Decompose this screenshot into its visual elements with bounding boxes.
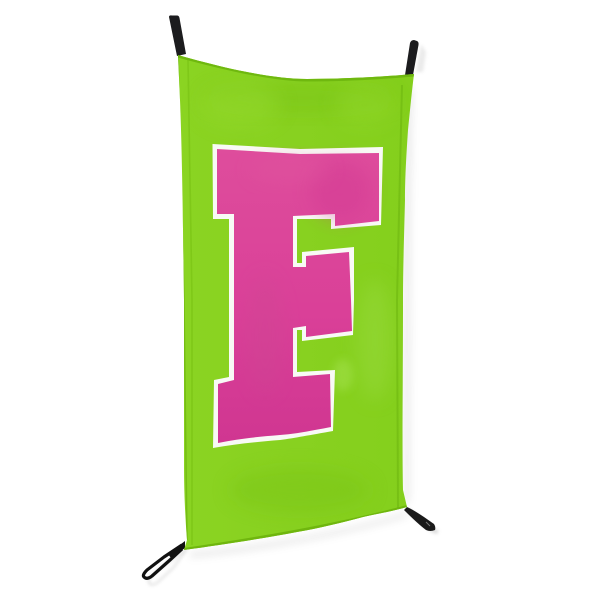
banner: green fabric (170, 50, 420, 560)
strap: top right (405, 40, 426, 75)
illustration: banner with letter F (142, 15, 439, 586)
letter F: white outline (212, 144, 383, 448)
letter F: pink fill (217, 149, 379, 443)
loop: bottom right (404, 507, 438, 532)
fabric folds (178, 55, 414, 550)
loop: bottom left (143, 541, 187, 585)
shadow: banner soft shadow (190, 80, 413, 558)
strap: top left (169, 15, 186, 56)
